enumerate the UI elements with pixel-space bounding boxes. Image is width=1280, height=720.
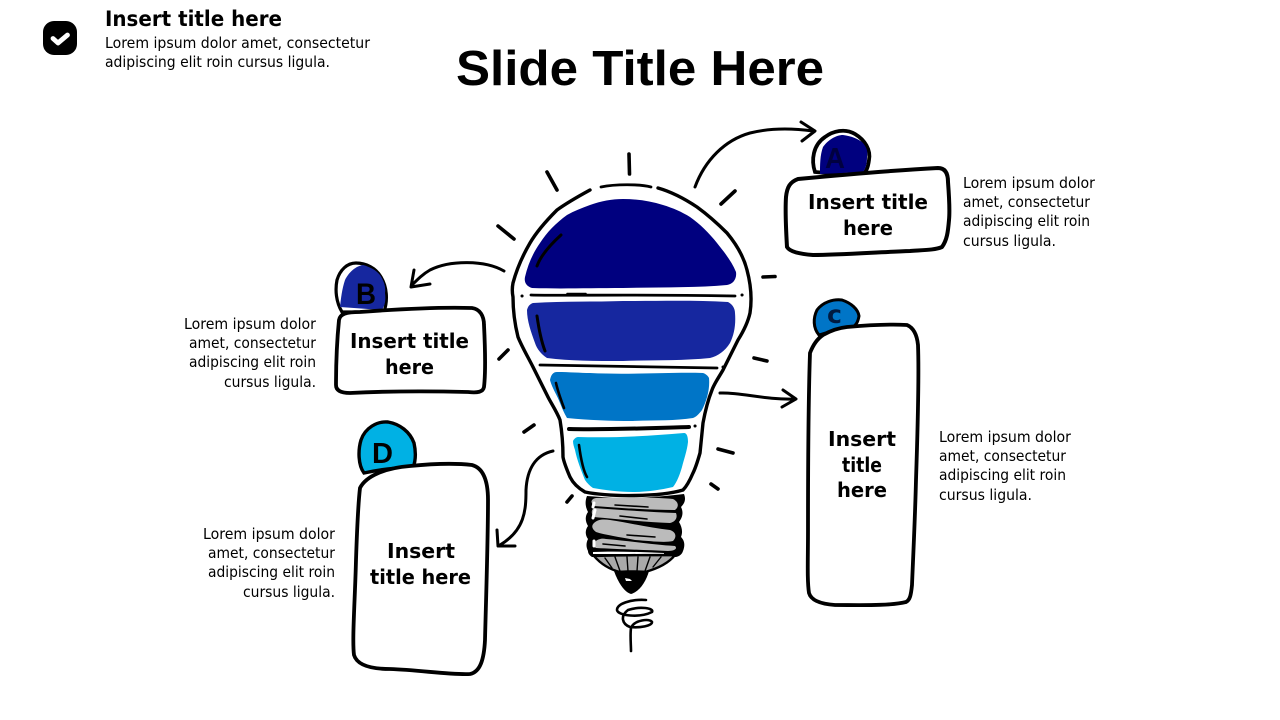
- base tip: [614, 570, 649, 594]
- card A label: Insert title: [808, 190, 928, 214]
- badge A: A: [825, 143, 845, 175]
- badge C: c: [827, 300, 842, 329]
- bulb segment 4: [573, 433, 688, 492]
- card C label: here: [837, 478, 887, 502]
- bulb outline: [512, 185, 751, 496]
- card A: [786, 168, 949, 255]
- panel: B: [184, 263, 485, 393]
- panel: A: [786, 131, 1096, 255]
- text D: Lorem ipsum dolor: [203, 525, 336, 543]
- arrow: to B: [411, 263, 504, 287]
- title: Slide Title Here: [456, 42, 824, 96]
- card D label: [370, 539, 471, 589]
- header note: Insert title here: [105, 7, 282, 31]
- card B label: Insert title: [350, 329, 469, 353]
- header note: Lorem ipsum dolor amet, consectetur: [105, 34, 371, 52]
- text A: cursus ligula.: [963, 232, 1056, 250]
- text B: Lorem ipsum dolor: [184, 315, 317, 333]
- card D label: title here: [370, 565, 471, 589]
- bulb segment 1: [525, 199, 736, 288]
- card A label: [808, 190, 928, 240]
- screw base: [586, 494, 685, 594]
- bulb segment 3: [550, 372, 709, 421]
- card D label: Insert: [387, 539, 455, 563]
- header note: adipiscing elit roin cursus ligula.: [105, 53, 330, 71]
- highlight strokes: [537, 235, 561, 266]
- card B label: [350, 329, 469, 379]
- text B: [184, 315, 317, 391]
- badge C: [814, 300, 859, 335]
- text B: adipiscing elit roin: [189, 353, 316, 371]
- filament wire: [617, 600, 652, 651]
- panel: C: [808, 300, 1072, 605]
- thread bands: [592, 497, 678, 510]
- card B: [336, 308, 485, 393]
- text D: amet, consectetur: [208, 544, 336, 562]
- icon: check badge: [43, 21, 77, 55]
- card C label: Insert: [828, 427, 896, 451]
- badge D: [359, 422, 415, 473]
- arrow: to A: [695, 122, 815, 187]
- base cap: [594, 555, 675, 572]
- card C label: title: [842, 453, 882, 477]
- card C: [808, 325, 918, 605]
- text A: amet, consectetur: [963, 193, 1091, 211]
- header note: [105, 7, 371, 71]
- text B: cursus ligula.: [224, 373, 316, 391]
- text C: adipiscing elit roin: [939, 466, 1066, 484]
- text D: adipiscing elit roin: [208, 563, 335, 581]
- arrow: to D: [497, 451, 553, 546]
- text C: [939, 428, 1072, 504]
- text B: amet, consectetur: [189, 334, 317, 352]
- text D: cursus ligula.: [243, 583, 335, 601]
- bulb segment 2: [527, 301, 735, 361]
- badge B: B: [356, 278, 376, 311]
- card A label: here: [843, 216, 893, 240]
- text A: adipiscing elit roin: [963, 212, 1090, 230]
- light bulb: [498, 154, 775, 651]
- card D: [353, 464, 488, 674]
- text C: amet, consectetur: [939, 447, 1067, 465]
- badge A: [813, 131, 869, 176]
- text A: [963, 174, 1096, 250]
- text C: cursus ligula.: [939, 486, 1032, 504]
- text C: Lorem ipsum dolor: [939, 428, 1072, 446]
- badge B: [336, 263, 386, 312]
- light rays: [498, 154, 775, 502]
- panel: D: [203, 422, 488, 674]
- badge D: D: [372, 438, 393, 470]
- card C label: [828, 427, 896, 502]
- text A: Lorem ipsum dolor: [963, 174, 1096, 192]
- arrow: to C: [720, 390, 796, 407]
- card B label: here: [385, 355, 434, 379]
- text D: [203, 525, 336, 601]
